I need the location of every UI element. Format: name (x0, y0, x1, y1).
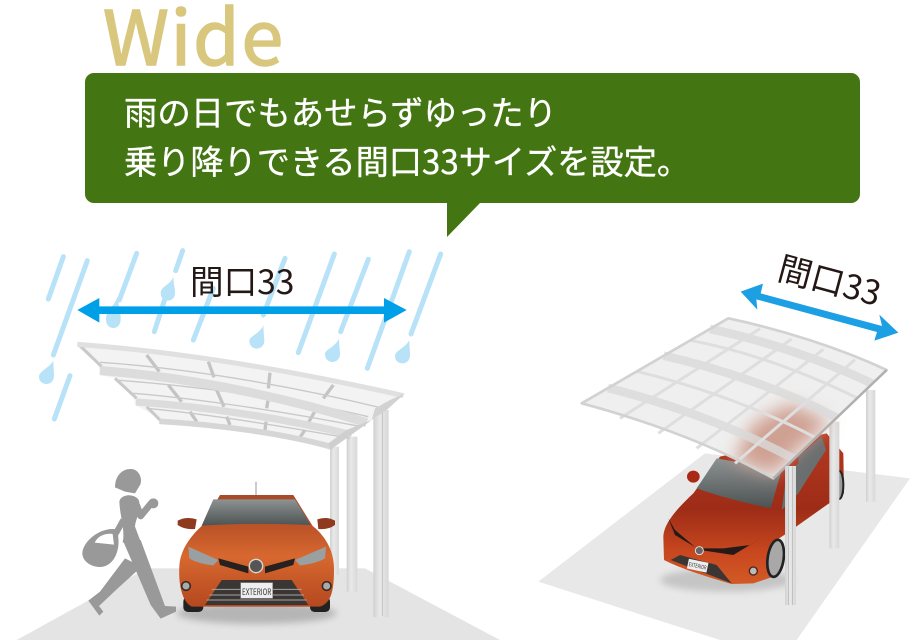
columns (330, 410, 389, 617)
right scene: carport from above (538, 284, 910, 640)
roof beams (608, 329, 872, 459)
label: 間口33 right: 間口33 (773, 241, 887, 316)
front rail (77, 344, 403, 396)
car shadow (177, 603, 337, 624)
front column (785, 466, 796, 605)
speech bubble callout (85, 73, 860, 237)
roof beams (100, 371, 367, 423)
speech bubble callout: 雨の日でもあせらずゆったり (124, 86, 557, 135)
person silhouette (82, 469, 176, 619)
speech bubble callout: 乗り降りできる間口33サイズを設定。 (124, 135, 690, 184)
floor (17, 568, 500, 640)
rain lines (48, 251, 441, 419)
red tint through roof (733, 403, 830, 475)
car: three-quarter view: EXTERIOR (688, 559, 708, 572)
direction arrow (77, 298, 407, 323)
car: front view: EXTERIOR (242, 586, 272, 598)
roof (582, 318, 887, 478)
floor (538, 453, 910, 640)
car: front view (178, 482, 335, 612)
roof ribs (620, 329, 857, 463)
roof ribs (147, 355, 333, 437)
car shadow (660, 568, 793, 592)
label: 間口33 left: 間口33 (190, 255, 294, 304)
left scene: carport front view in rain (17, 251, 500, 640)
back column (866, 390, 875, 502)
car: three-quarter view (663, 433, 844, 584)
columns (829, 422, 839, 548)
roof side rails (79, 345, 160, 420)
roof (77, 342, 405, 450)
direction arrow (741, 284, 898, 341)
rain drops (39, 277, 410, 384)
